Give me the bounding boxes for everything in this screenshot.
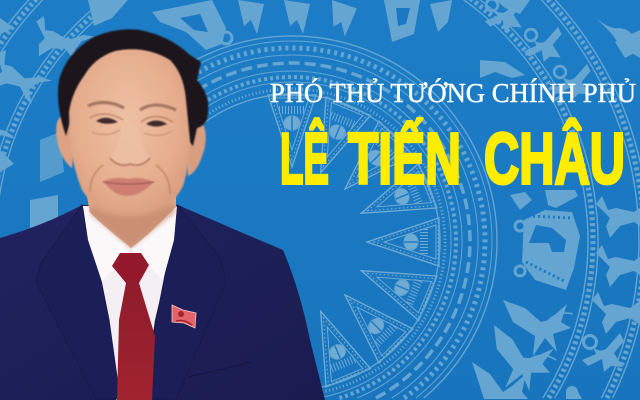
necktie <box>112 253 155 400</box>
eyes <box>96 118 167 126</box>
eye creases <box>90 114 173 122</box>
cheek lines <box>90 165 170 194</box>
hair <box>58 29 208 146</box>
face <box>69 49 190 218</box>
party flag pin <box>172 305 196 328</box>
suit jacket <box>0 205 325 400</box>
drum figures left <box>0 0 128 228</box>
eyebrows <box>88 102 176 110</box>
drum figures right <box>472 0 640 400</box>
drum figures top <box>152 0 452 50</box>
collar points <box>83 206 177 282</box>
drum rays <box>268 95 439 387</box>
mouth <box>103 178 154 196</box>
portrait of the deputy prime minister <box>0 29 325 400</box>
title: name: LÊ <box>280 118 329 200</box>
nose <box>110 125 150 165</box>
chin shadow <box>90 204 176 248</box>
pocket <box>188 362 250 377</box>
right lapel <box>143 205 226 399</box>
neck <box>86 190 176 248</box>
title: name <box>280 118 625 200</box>
title: name: TIẾN <box>348 118 461 200</box>
ears <box>56 116 206 176</box>
left lapel <box>36 205 120 399</box>
subtitle: position: PHÓ THỦ TƯỚNG CHÍNH PHỦ <box>270 78 636 108</box>
facial features <box>88 102 176 196</box>
shirt and collar <box>82 206 176 400</box>
